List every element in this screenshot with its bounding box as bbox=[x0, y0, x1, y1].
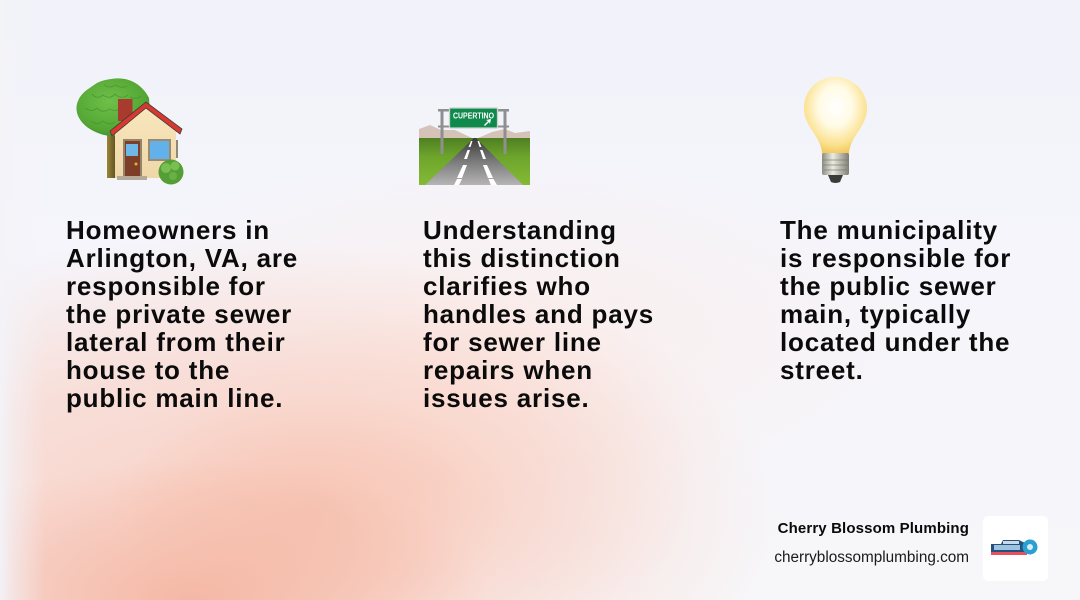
text: homeowners: house to the bbox=[66, 355, 230, 385]
brand name: Cherry Blossom Plumbing bbox=[778, 520, 969, 537]
text: distinction: handles and pays bbox=[423, 299, 654, 329]
text: distinction: Understanding bbox=[423, 215, 617, 245]
text: distinction bbox=[423, 215, 654, 413]
text: municipality: street. bbox=[780, 355, 864, 385]
text: municipality: The municipality bbox=[780, 215, 998, 245]
text: distinction: clarifies who bbox=[423, 271, 591, 301]
icon: house with tree bbox=[76, 78, 184, 184]
icon: highway with sign: CUPERTINO bbox=[453, 112, 494, 120]
text: municipality: main, typically bbox=[780, 299, 971, 329]
text: municipality: located under the bbox=[780, 327, 1010, 357]
text: municipality: the public sewer bbox=[780, 271, 997, 301]
text: homeowners: Arlington, VA, are bbox=[66, 243, 298, 273]
text: homeowners: lateral from their bbox=[66, 327, 286, 357]
text: distinction: for sewer line bbox=[423, 327, 602, 357]
icon: light bulb bbox=[804, 77, 867, 183]
text: homeowners: Homeowners in bbox=[66, 215, 270, 245]
text: municipality: is responsible for bbox=[780, 243, 1011, 273]
logo tile bbox=[983, 516, 1048, 581]
icon: company logo bbox=[991, 540, 1038, 555]
text: homeowners: public main line. bbox=[66, 383, 283, 413]
text: distinction: repairs when bbox=[423, 355, 593, 385]
brand website: cherryblossomplumbing.com bbox=[774, 549, 969, 566]
text: municipality bbox=[780, 215, 1011, 385]
text: homeowners bbox=[66, 215, 298, 413]
text: homeowners: the private sewer bbox=[66, 299, 292, 329]
text: homeowners: responsible for bbox=[66, 271, 266, 301]
text: distinction: this distinction bbox=[423, 243, 621, 273]
text: distinction: issues arise. bbox=[423, 383, 590, 413]
icon: highway with sign bbox=[419, 107, 530, 185]
